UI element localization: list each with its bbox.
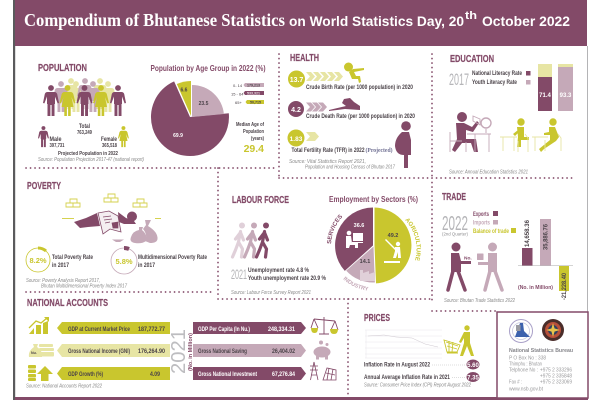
chevrons: birth [306,72,343,81]
unemployment rates: Unemployment rate 4.8 % [248,268,310,274]
death rate badge: 4.2 [291,107,301,114]
icon: crowd of people [43,78,126,116]
median age: (years) [251,136,264,142]
bar: GDP: 187,772.77 [138,326,165,333]
source: Source: Annual Education Statistics 2021 [449,170,528,176]
age legend: 179,213 [247,84,260,88]
inflation rate row [364,360,480,370]
pie chart: employment: 36.6 [354,223,364,229]
age legend [231,83,264,105]
logo: national emblem [542,319,564,341]
fertility badge: 1.83 [290,136,303,143]
pie chart: age groups: 6.6 [181,88,188,94]
bar: gross national investment [193,367,306,380]
year [442,213,468,238]
legend: Balance of trade [473,228,509,235]
total poverty label: in 2017 [52,262,69,269]
contact details: +975 2 335848 [540,374,572,380]
icon: factory [360,270,375,281]
heading: labour force: LABOUR FORCE [232,194,289,206]
male count: Male [50,136,62,143]
age legend: 0- 14 [233,83,243,88]
contact details: P O Box No : 338 [509,356,546,362]
source: Source: Population Projection 2017-47 (national report) [38,157,144,163]
icon: adult reading [450,112,491,152]
panel: prices [364,312,480,388]
unit note: (No. in Million) [518,285,553,291]
contact details [508,356,572,392]
total poverty ring [26,248,50,272]
bar: national literacy: 71.4 [539,93,551,99]
bar chart: trade: -21,228.40 [561,273,568,300]
title date part [289,10,570,29]
total population: 763,249 [77,130,92,136]
birth rate label: Crude Birth Rate (per 1000 population) in 2020 [306,84,413,91]
panel: education [449,53,573,176]
multidimensional poverty label [138,254,207,269]
heading: trade: TRADE [442,191,466,203]
icon: exporter: No. [464,256,472,262]
pie chart: employment: 49.2 [388,233,398,239]
pie chart: age groups: 69.9 [173,133,183,139]
contact details: Thimphu : Bhutan [509,362,542,368]
legend [472,70,530,86]
death rate label: Crude Death Rate (per 1000 population) in 2020 [306,113,415,120]
legend: Youth Literacy Rate [472,79,517,86]
panel: health [288,52,415,170]
bar: GNI: 176,264.90 [138,348,165,355]
bar: GDP per capita: GDP Per Capita (In Nu.) [198,326,250,333]
bar: GDP: GDP at Current Market Price [68,326,130,333]
bar: gross national investment: 67,276.84 [272,371,295,378]
bar: gross national saving: Gross National Saving [198,348,247,355]
heading: employment: Employment by Sectors (%) [329,195,418,204]
total population [77,123,92,136]
title: Compendium of Bhutanese Statistics [24,10,285,30]
age legend: 50,715 [250,101,261,105]
bar: GNI: Gross National Income (GNI) [68,348,130,355]
icon: person sleeping under newspaper [74,211,137,242]
panel: labour force [230,194,421,296]
bar chart: trade: 35,886.76 [542,224,550,250]
fertility label: (Projected) [366,147,392,154]
age legend: 533,321 [247,92,260,96]
contact details: +975 2 323069 [540,380,572,386]
icon: walkers [232,222,269,257]
panel: poverty [26,180,207,290]
inflation rate row: 5.60 [467,363,479,369]
year: 2021 [231,266,247,282]
logo: national statistics bureau [510,320,532,342]
male count [50,136,65,149]
source: Source: Vital Statistics Report 2021, [289,159,366,165]
bar: GDP growth [57,367,170,380]
source [289,159,395,170]
title date part: th [465,10,477,22]
heading: health: HEALTH [290,52,319,64]
icon: man with cart [444,325,474,356]
legend: National Literacy Rate [472,70,522,77]
source: Source: Bhutan Trade Statistics 2022 [444,298,515,304]
contact details: Telphone No : [509,368,538,374]
bar: GNI [57,344,170,357]
year: 2017 [449,70,469,89]
male count: 397,731 [50,143,65,149]
multidimensional poverty label: Multidimensional Poverty Rate [138,254,207,261]
pie chart: employment: 14.1 [360,259,370,265]
bar chart: trade: 14,658.36 [524,220,531,247]
panel: national accounts [26,297,338,390]
bar: gross national investment: Gross National Investment [198,371,257,378]
legend [473,211,516,235]
bar: GDP [57,322,170,334]
year rotated: 2021 [168,329,190,374]
heading: population: POPULATION [38,62,87,74]
panel: population [38,62,266,163]
bar: GDP per capita [193,322,306,334]
heading: poverty: POVERTY [27,180,61,192]
heading: national accounts: NATIONAL ACCOUNTS [27,297,108,309]
icon: student one [500,118,529,152]
heading: prices: PRICES [364,312,390,324]
pie chart: age groups [151,81,229,156]
legend: Imports [473,220,490,226]
icon: scales [311,317,338,334]
multidimensional poverty label: in 2017 [138,262,155,269]
icon: piggy bank [314,340,330,360]
fertility label: Total Fertility Rate (TFR) in 2022 [292,147,365,154]
total poverty label [52,254,93,269]
panel: contact box [497,312,588,398]
bar: GDP growth: 4.09 [150,371,160,378]
icon: sacks [130,220,158,243]
median age: 29.4 [244,143,264,155]
female count [101,136,117,149]
contact details: www.nsb.gov.bt [508,386,543,392]
bar: gross national saving [193,344,306,357]
annual inflation row [364,372,480,382]
multidimensional poverty ring [111,248,137,274]
icon: female [118,126,129,147]
chevrons: fertility [306,132,319,141]
bottom bar [15,397,588,400]
icon: pregnant woman [395,121,411,168]
icon: money bag and coins: Nu. [31,351,37,355]
faint inflation line chart [365,330,442,358]
caption: Projected Population in 2022 [58,151,118,157]
median age: Median Age of [236,122,264,128]
icon: money bag and coins [29,344,54,357]
unemployment rates [248,268,327,282]
sector label: services: SERVICES [327,214,342,244]
icon: transmission tower and solar panel [310,362,336,380]
title date part: October 2022 [482,14,570,29]
inflation rate row: Inflation Rate in August 2022 [364,362,430,368]
panel: trade [442,191,573,304]
total poverty label: Total Poverty Rate [52,254,93,261]
source: Population and Housing Census of Bhutan 2017 [305,164,395,170]
icon: coins and arrow [28,365,53,381]
source: Source: National Accounts Report 2022 [26,384,102,390]
unemployment rates: Youth unemployment rate 20.9 % [248,276,327,282]
female count: Female [101,136,117,143]
icon: student two [532,118,561,152]
contact details: Fax # : [509,380,522,386]
age legend: 15 - 64 [231,92,244,96]
year: 2022 [442,213,468,235]
median age [236,122,264,155]
total population: Total [79,123,90,130]
icon: importer [477,242,502,290]
icon: office worker [346,231,363,248]
chevrons: death [306,102,327,112]
organisation name: National Statistics Bureau [509,348,573,354]
pie chart: age groups: 23.5 [199,101,209,107]
annual inflation row: 7.35 [467,375,479,381]
bar: gross national saving: 26,404.02 [272,348,295,355]
icon: bricks [62,194,161,218]
source: Bhutan Multidimensional Poverty Index 2017 [41,284,127,290]
annual inflation row: Annual Average Inflation Rate in 2021 [364,374,450,381]
unit note rotated: (No. in Million) [188,333,194,371]
pie chart: employment [335,208,411,283]
source [26,278,127,290]
bar: youth literacy: 93.3 [560,93,572,99]
heading: age group: Population by Age Group in 2022 (%) [150,63,266,73]
birth rate badge: 13.7 [290,77,303,84]
median age: Population [243,129,264,135]
icon: baby [344,62,364,83]
year: (2nd Quarter) [442,232,468,238]
title date part: on World Statistics Day, 20 [289,14,464,29]
icon: male [38,126,49,147]
source: Source: Labour Force Survey Report 2021 [231,290,311,296]
sector label: agriculture: AGRICULTURE [405,218,421,261]
source: Source: Consumer Price Index (CPI) Report August 2022 [364,382,471,388]
age legend: 65+ [235,100,242,105]
bar chart: trade [518,219,573,300]
total poverty ring: 8.2% [29,256,47,265]
icon: lying figure [329,98,360,111]
female count: 365,518 [102,143,117,149]
bar: GDP growth: GDP Growth (%) [68,371,103,378]
multidimensional poverty ring: 5.8% [115,257,133,266]
source: Source: Poverty Analysis Report 2017, [26,278,100,284]
bar: GDP per capita: 248,334.31 [268,326,295,333]
icon: growth chart [29,317,49,334]
icon: farmer [384,239,401,263]
legend: Exports [473,211,489,218]
sector label: industry: INDUSTRY [343,276,368,290]
heading: education: EDUCATION [450,53,494,65]
contact details: +975 2 333296 [540,368,572,374]
header banner [15,0,587,46]
